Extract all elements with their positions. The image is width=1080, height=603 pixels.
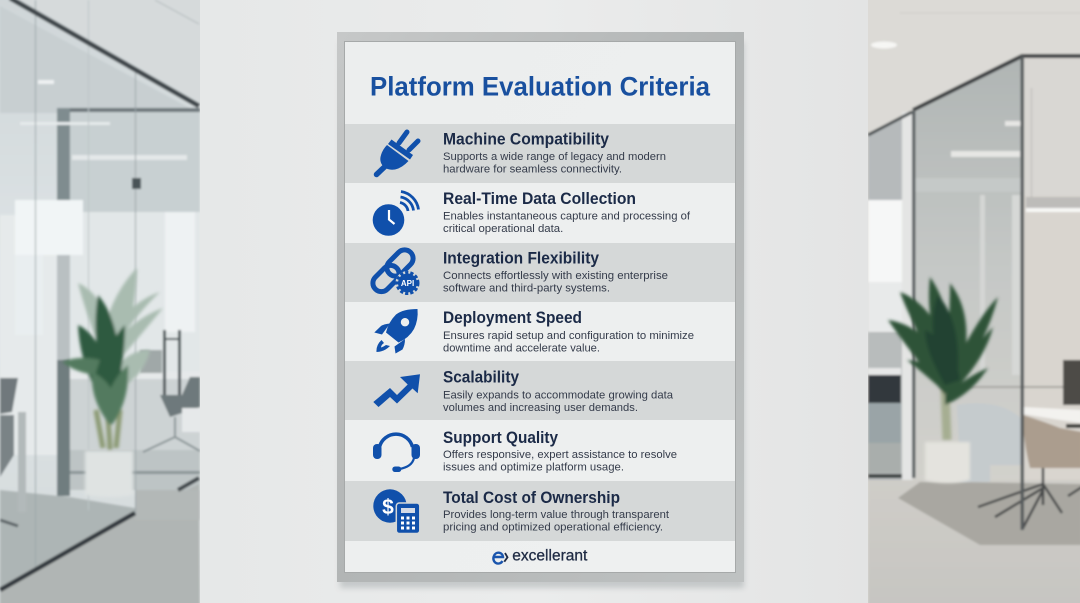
description: volumes and increasing user demands. [443,402,638,414]
heading: Deployment Speed [443,308,582,327]
logo: excellerant [493,548,588,565]
description: hardware for seamless connectivity. [443,164,622,176]
heading: Real-Time Data Collection [443,189,636,208]
plant: right [888,277,998,483]
wordmark: excellerant [512,548,588,565]
description: software and third-party systems. [443,283,610,295]
icon: headset [373,434,420,472]
icon: chain link with API gear: API [401,279,414,288]
heading: Machine Compatibility [443,130,609,148]
heading: Total Cost of Ownership [443,488,620,507]
background: left office through glass [0,0,205,603]
row: Real-Time Data Collection [345,183,735,243]
row: Support Quality [345,420,735,481]
row: Integration Flexibility [345,243,735,302]
row: Machine Compatibility [345,124,735,183]
plant: left [62,268,163,497]
row: Scalability [345,361,735,420]
title: Platform Evaluation Criteria [370,72,711,102]
icon: rising arrow [373,374,420,407]
poster shadow [340,42,744,588]
poster background [344,42,736,572]
icon: dollar coin and calculator [373,489,420,534]
heading: Scalability [443,368,519,386]
description: pricing and optimized operational efficiency. [443,522,663,534]
poster [344,42,736,572]
description: Enables instantaneous capture and processing of [443,210,691,222]
description: Offers responsive, expert assistance to resolve [443,449,677,461]
icon: rocket [374,309,418,354]
description: Provides long-term value through transparent [443,509,670,521]
icon: clock with signal [373,192,418,236]
background: right office and meeting room [866,0,1080,603]
icon: dollar coin and calculator: $ [382,496,394,519]
icon: chain link with API gear [369,246,420,295]
description: downtime and accelerate value. [443,343,600,355]
description: issues and optimize platform usage. [443,462,624,474]
poster frame [337,32,744,582]
row: Total Cost of Ownership [345,481,735,541]
description: critical operational data. [443,223,563,235]
icon: plug [376,132,418,174]
wall [200,0,868,603]
heading: Integration Flexibility [443,248,599,268]
description: Ensures rapid setup and configuration to minimize [443,330,694,342]
heading: Support Quality [443,428,558,447]
description: Easily expands to accommodate growing data [443,390,674,402]
description: Supports a wide range of legacy and modern [443,151,666,163]
description: Connects effortlessly with existing enterprise [443,270,668,282]
logo mark [493,553,508,564]
row: Deployment Speed [345,302,735,361]
